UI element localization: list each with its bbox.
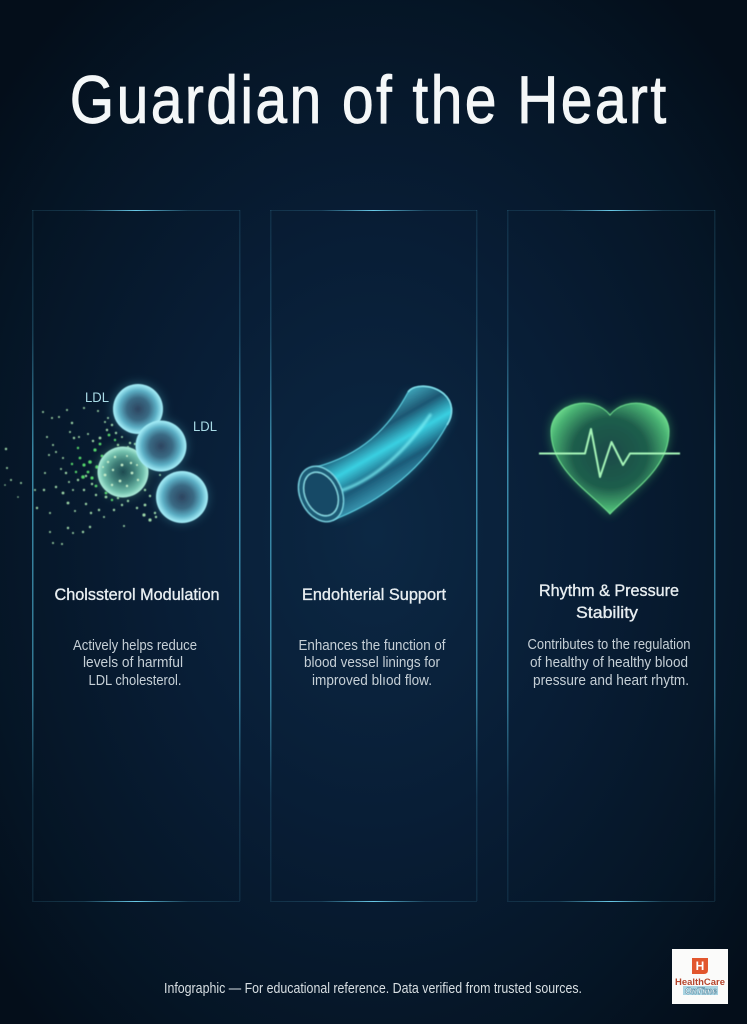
body text bbox=[298, 637, 446, 689]
LDL cell with particles bbox=[98, 446, 148, 498]
title: Guardian of the Heart bbox=[70, 62, 666, 138]
LDL cell bbox=[136, 420, 186, 472]
label: LDL: LDL bbox=[85, 389, 109, 405]
logo: HealthCare OnTime: OnTime bbox=[685, 986, 717, 996]
heading bbox=[539, 581, 679, 622]
body text: blood vessel linings for bbox=[304, 654, 440, 671]
body text bbox=[528, 636, 690, 689]
icon: glowing heart with pulse bbox=[539, 402, 680, 515]
heading: Rhythm & Pressure bbox=[539, 581, 679, 600]
body text: LDL cholesterol. bbox=[88, 672, 182, 689]
logo: HealthCare OnTime bbox=[672, 949, 728, 1004]
particle cloud bbox=[4, 407, 161, 545]
particles over the cell bbox=[102, 455, 139, 487]
body text bbox=[73, 637, 197, 689]
heading: Cholssterol Modulation bbox=[54, 585, 220, 604]
LDL cell bbox=[113, 384, 163, 434]
body text: levels of harmful bbox=[83, 654, 183, 671]
icon: LDL cells and particles bbox=[4, 383, 217, 545]
logo: HealthCare OnTime: H bbox=[696, 959, 704, 973]
body text: Actively helps reduce bbox=[73, 637, 197, 654]
body text: of healthy of healthy blood bbox=[530, 654, 688, 671]
logo: HealthCare OnTime: HealthCare bbox=[675, 977, 725, 988]
footer note: Infographic — For educational reference. Data verified from trusted sources. bbox=[164, 981, 582, 997]
panel: rhythm and pressure stability bbox=[507, 210, 716, 902]
panel: cholesterol modulation bbox=[4, 210, 241, 902]
body text: improved blıod flow. bbox=[312, 672, 432, 689]
body text: Enhances the function of bbox=[298, 637, 446, 654]
body text: Contributes to the regulation bbox=[528, 636, 690, 653]
icon: blood vessel tube bbox=[290, 386, 452, 529]
LDL cell bbox=[156, 471, 208, 523]
logo icon bbox=[692, 958, 708, 974]
heading: Stability bbox=[576, 603, 639, 622]
body text: pressure and heart rhytm. bbox=[533, 672, 689, 689]
label: LDL: LDL bbox=[193, 418, 217, 434]
panel: endothelial support bbox=[270, 210, 478, 902]
heading: Endohterial Support bbox=[302, 585, 446, 604]
halo glow bbox=[97, 383, 208, 523]
